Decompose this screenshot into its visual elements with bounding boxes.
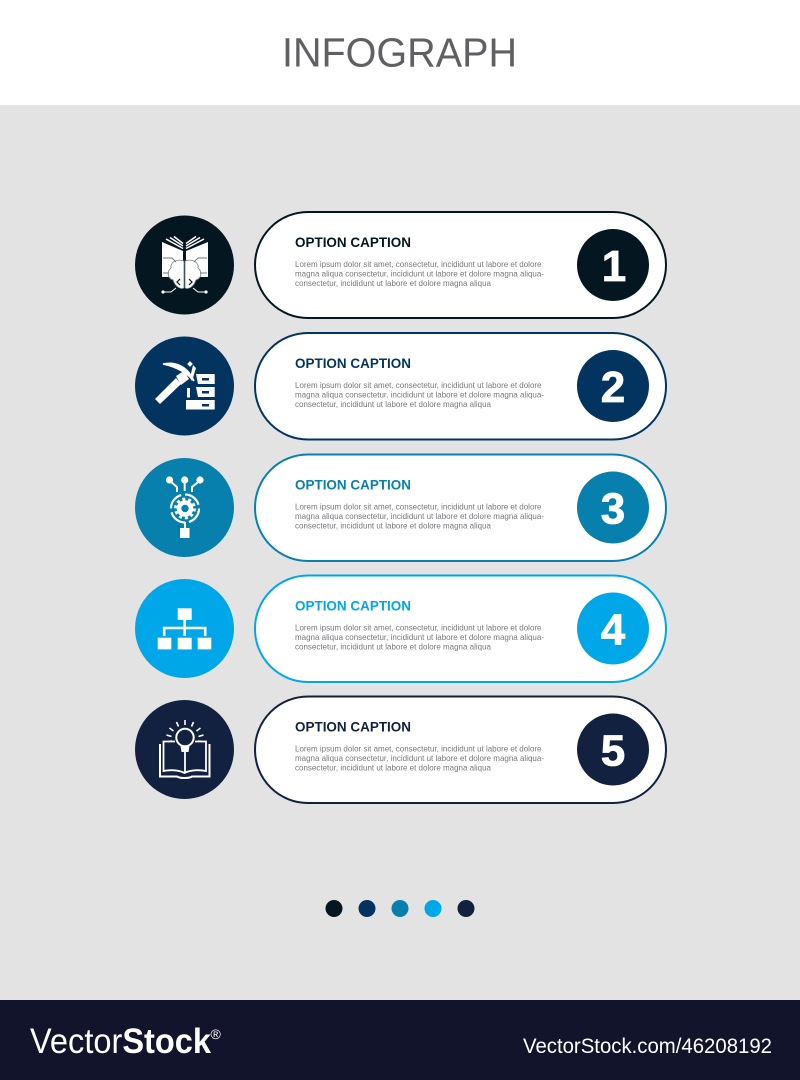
body text 4: magna aliqua consectetur, incididunt ut labore et dolore magna aliqua- — [295, 632, 544, 642]
body text 2: consectetur, incididunt ut labore et dolore magna aliqua — [295, 399, 491, 409]
body text 5: magna aliqua consectetur, incididunt ut labore et dolore magna aliqua- — [295, 753, 544, 763]
caption 2: OPTION CAPTION — [295, 356, 411, 371]
body text 3: magna aliqua consectetur, incididunt ut labore et dolore magna aliqua- — [295, 511, 544, 521]
number badge 4 — [577, 592, 649, 664]
body text 4: Lorem ipsum dolor sit amet, consectetur, incididunt ut labore et dolore — [295, 622, 542, 632]
panel: option 3 — [135, 454, 666, 561]
caption 5: OPTION CAPTION — [295, 720, 411, 734]
number badge 4: 4 — [601, 606, 626, 654]
body text 5 — [295, 744, 544, 772]
caption 3: OPTION CAPTION — [295, 478, 411, 492]
body text 3: Lorem ipsum dolor sit amet, consectetur, incididunt ut labore et dolore — [295, 502, 542, 512]
pill card 2 — [255, 333, 666, 440]
number badge 3 — [577, 472, 649, 544]
icon circle 2: pickaxe and servers — [135, 336, 234, 436]
title: INFOGRAPH — [282, 30, 517, 76]
body text 5: Lorem ipsum dolor sit amet, consectetur, incididunt ut labore et dolore — [295, 744, 542, 754]
icon circle 3: gear with nodes — [135, 458, 234, 557]
pill card 4 — [255, 576, 666, 682]
number badge 2 — [577, 350, 649, 422]
icon circle 5: book and light bulb — [135, 700, 234, 799]
body text 3: consectetur, incididunt ut labore et dolore magna aliqua — [295, 520, 491, 530]
pill card 3 — [255, 454, 666, 561]
panel: option 2 — [135, 333, 666, 440]
panel: option 5 — [135, 696, 666, 803]
header band — [0, 0, 800, 105]
icon circle 1: book and brain — [135, 216, 234, 314]
body text 1: Lorem ipsum dolor sit amet, consectetur, incididunt ut labore et dolore — [295, 259, 542, 269]
panel: option 4 — [135, 576, 666, 682]
footer logo: VectorStock — [30, 1022, 211, 1061]
body text 1 — [295, 259, 544, 288]
number badge 1 — [577, 229, 649, 301]
body text 2: Lorem ipsum dolor sit amet, consectetur, incididunt ut labore et dolore — [295, 380, 542, 390]
body text 5: consectetur, incididunt ut labore et dolore magna aliqua — [295, 762, 491, 772]
footer image id: VectorStock.com/46208192 — [523, 1035, 772, 1058]
caption 4: OPTION CAPTION — [295, 598, 411, 614]
number badge 1: 1 — [602, 242, 626, 291]
body text 2: magna aliqua consectetur, incididunt ut labore et dolore magna aliqua- — [295, 390, 544, 400]
body text 4: consectetur, incididunt ut labore et dolore magna aliqua — [295, 642, 491, 652]
registered mark: ® — [210, 1026, 222, 1042]
panel: option 1 — [135, 212, 666, 318]
body text 3 — [295, 502, 544, 530]
caption 1: OPTION CAPTION — [295, 235, 411, 250]
footer band — [0, 1000, 800, 1080]
number badge 5 — [577, 714, 649, 786]
icon circle 4: hierarchy — [135, 579, 234, 678]
pill card 5 — [255, 696, 666, 803]
number badge 2: 2 — [601, 363, 625, 412]
number badge 5: 5 — [601, 726, 625, 776]
number badge 3: 3 — [601, 484, 625, 534]
pagination dots — [326, 900, 474, 917]
body text 2 — [295, 380, 544, 409]
body text 1: consectetur, incididunt ut labore et dolore magna aliqua — [295, 278, 491, 288]
body text 1: magna aliqua consectetur, incididunt ut labore et dolore magna aliqua- — [295, 268, 544, 278]
pill card 1 — [255, 212, 666, 318]
body text 4 — [295, 622, 544, 652]
